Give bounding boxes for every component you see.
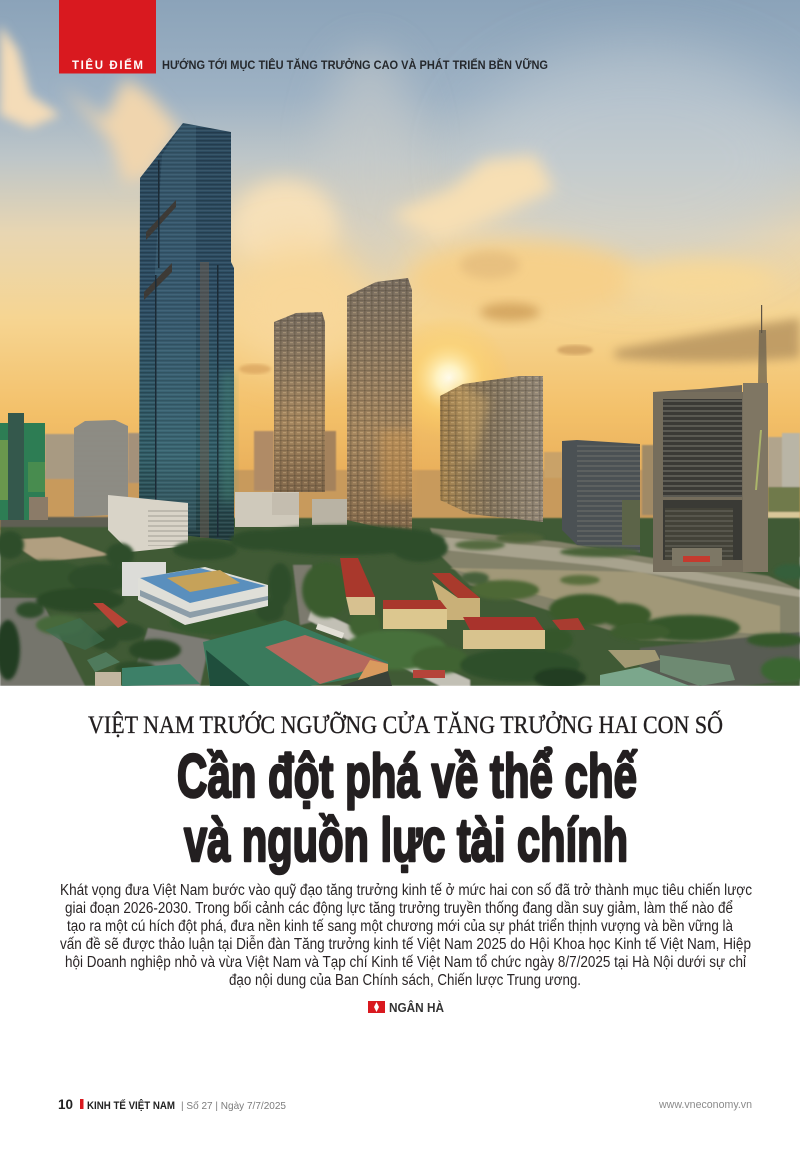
kicker headline: VIỆT NAM TRƯỚC NGƯỠNG CỬA TĂNG TRƯỞNG HAI CON SỐ xyxy=(88,710,723,739)
red tag xyxy=(59,0,156,74)
clouds xyxy=(0,25,800,374)
trees xyxy=(0,525,800,688)
small roofs and road details xyxy=(45,603,735,686)
byline xyxy=(368,1000,444,1015)
left skyline buildings xyxy=(0,413,128,520)
photo: Hanoi skyline at sunset xyxy=(0,0,800,688)
distant city xyxy=(0,431,800,557)
landmark glass tower xyxy=(139,123,234,541)
ground xyxy=(0,517,800,686)
sky xyxy=(0,0,800,530)
issue and date: | Số 27 | Ngày 7/7/2025 xyxy=(181,1100,286,1112)
magazine name: KINH TẾ VIỆT NAM xyxy=(87,1099,175,1112)
blue-roof building xyxy=(122,562,268,625)
section tag xyxy=(59,0,156,74)
intro paragraph xyxy=(60,882,752,989)
tag label: TIÊU ĐIỂM xyxy=(72,59,143,72)
main title xyxy=(177,742,637,874)
icon: author flag xyxy=(368,1001,385,1013)
intro paragraph: đạo nội dung của Ban Chính sách, Chiến lược Trung ương. xyxy=(229,972,581,989)
website: www.vneconomy.vn xyxy=(658,1099,752,1111)
section heading: HƯỚNG TỚI MỤC TIÊU TĂNG TRƯỞNG CAO VÀ PHÁT TRIỂN BỀN VỮNG xyxy=(162,57,548,72)
green and copper warehouse roofs xyxy=(203,620,392,686)
residential towers xyxy=(274,278,543,535)
author name: NGÂN HÀ xyxy=(389,1000,444,1015)
red marker xyxy=(80,1099,84,1109)
page number: 10 xyxy=(58,1096,73,1112)
office towers xyxy=(562,305,768,572)
sun glow xyxy=(412,326,490,414)
red-roof colonial buildings xyxy=(340,558,585,649)
footer xyxy=(58,1096,752,1112)
white and low buildings xyxy=(108,492,347,552)
